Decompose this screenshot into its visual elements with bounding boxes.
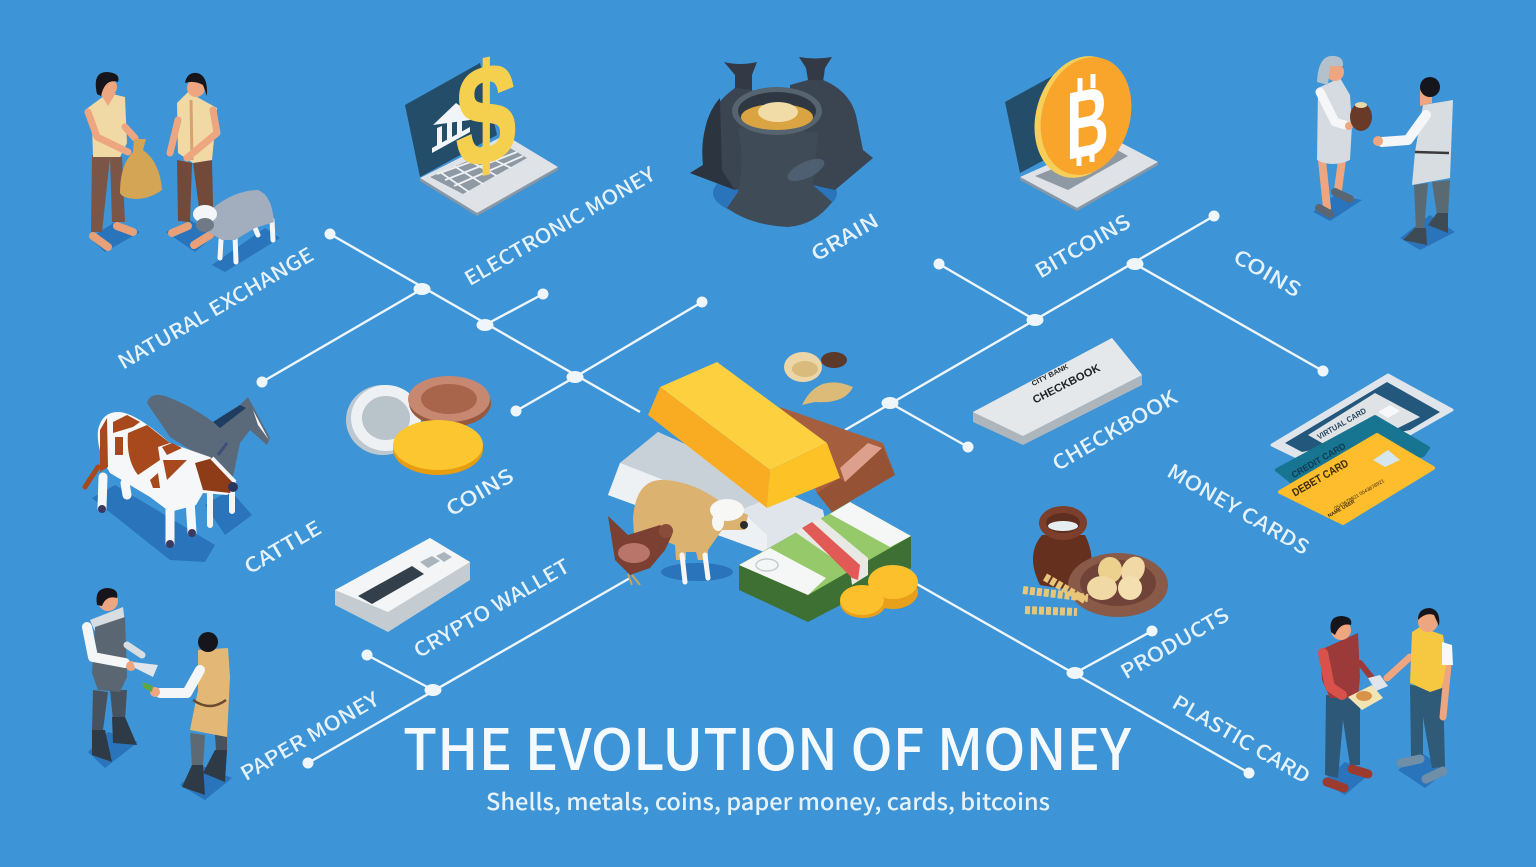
merchant left — [87, 588, 158, 768]
illustration: money cards: 0543678921 0543678921 — [1333, 478, 1386, 512]
illustration: money cards: DEBET CARD — [1290, 457, 1351, 499]
icon: bank — [432, 103, 470, 153]
sack — [120, 139, 162, 199]
label: natural exchange: NATURAL EXCHANGE — [112, 239, 318, 375]
label: electronic money: ELECTRONIC MONEY — [458, 158, 661, 292]
illustration: money cards: NAME USER — [1327, 499, 1356, 519]
illustration: cattle — [85, 395, 270, 562]
label: money cards: MONEY CARDS — [1162, 455, 1316, 561]
illustration: natural exchange people, sack and sheep — [85, 72, 280, 272]
label: cattle: CATTLE — [238, 512, 326, 580]
screen — [405, 63, 497, 177]
illustration: money cards: VIRTUAL CARD — [1316, 406, 1368, 441]
keyboard — [430, 145, 527, 194]
illustration: grain sacks — [690, 57, 873, 227]
illustration: coins exchange people — [1313, 56, 1455, 250]
label: products: PRODUCTS — [1114, 599, 1234, 685]
person left — [85, 72, 140, 252]
hen — [608, 516, 673, 585]
illustration: products — [1023, 506, 1168, 617]
wheat — [1023, 577, 1088, 612]
icon: bitcoin coin — [1021, 45, 1145, 189]
illustration: crypto wallet — [335, 538, 470, 632]
illustration: money cards: CREDIT CARD — [1290, 441, 1348, 480]
illustration: checkbook: CHECKBOOK — [1031, 362, 1102, 406]
illustration: money cards — [1272, 375, 1452, 523]
illustration: checkbook: CITY BANK — [1031, 363, 1070, 388]
copper bar — [780, 407, 895, 512]
label: plastic card: PLASTIC CARD — [1168, 687, 1316, 789]
man in red — [1320, 616, 1388, 795]
jug — [1033, 506, 1092, 590]
horse — [147, 395, 270, 525]
man in yellow — [1387, 608, 1453, 788]
silver bar — [608, 432, 825, 553]
woman — [1313, 56, 1372, 221]
sheep — [193, 190, 280, 272]
label: checkbook: CHECKBOOK — [1046, 381, 1183, 477]
back left sack — [690, 62, 778, 190]
front sack — [727, 128, 832, 227]
gold bar — [648, 362, 840, 508]
sheep — [633, 480, 748, 582]
person right — [166, 73, 217, 252]
illustration: plastic card people — [1320, 608, 1453, 795]
illustration: center treasury — [608, 352, 918, 622]
icon: dollar sign: $ — [456, 29, 516, 200]
label: coins right: COINS — [1229, 241, 1307, 303]
illustration: coins pile — [346, 376, 491, 475]
gold coins — [840, 565, 918, 618]
icon: bitcoin coin: B — [1066, 66, 1109, 182]
cow — [85, 412, 238, 548]
illustration: checkbook — [973, 338, 1142, 445]
subtitle: Shells, metals, coins, paper money, cards, bitcoins — [486, 783, 1050, 817]
label: grain: GRAIN — [805, 205, 883, 267]
back right sack — [790, 57, 873, 190]
label: paper money: PAPER MONEY — [234, 683, 385, 787]
stack of banknotes — [739, 502, 911, 622]
illustration: electronic money laptop — [405, 29, 558, 216]
label: bitcoins: BITCOINS — [1029, 206, 1135, 284]
nest with eggs — [1068, 552, 1168, 617]
flowchart connector lines — [256, 210, 1328, 778]
man — [1373, 77, 1455, 250]
label: coins left: COINS — [440, 460, 518, 522]
illustration: paper money people — [87, 588, 232, 800]
title: THE EVOLUTION OF MONEY — [403, 705, 1131, 787]
label: crypto wallet: CRYPTO WALLET — [408, 550, 574, 664]
buyer right — [142, 632, 232, 800]
spices — [784, 352, 853, 405]
illustration: bitcoin laptop — [1005, 45, 1158, 211]
